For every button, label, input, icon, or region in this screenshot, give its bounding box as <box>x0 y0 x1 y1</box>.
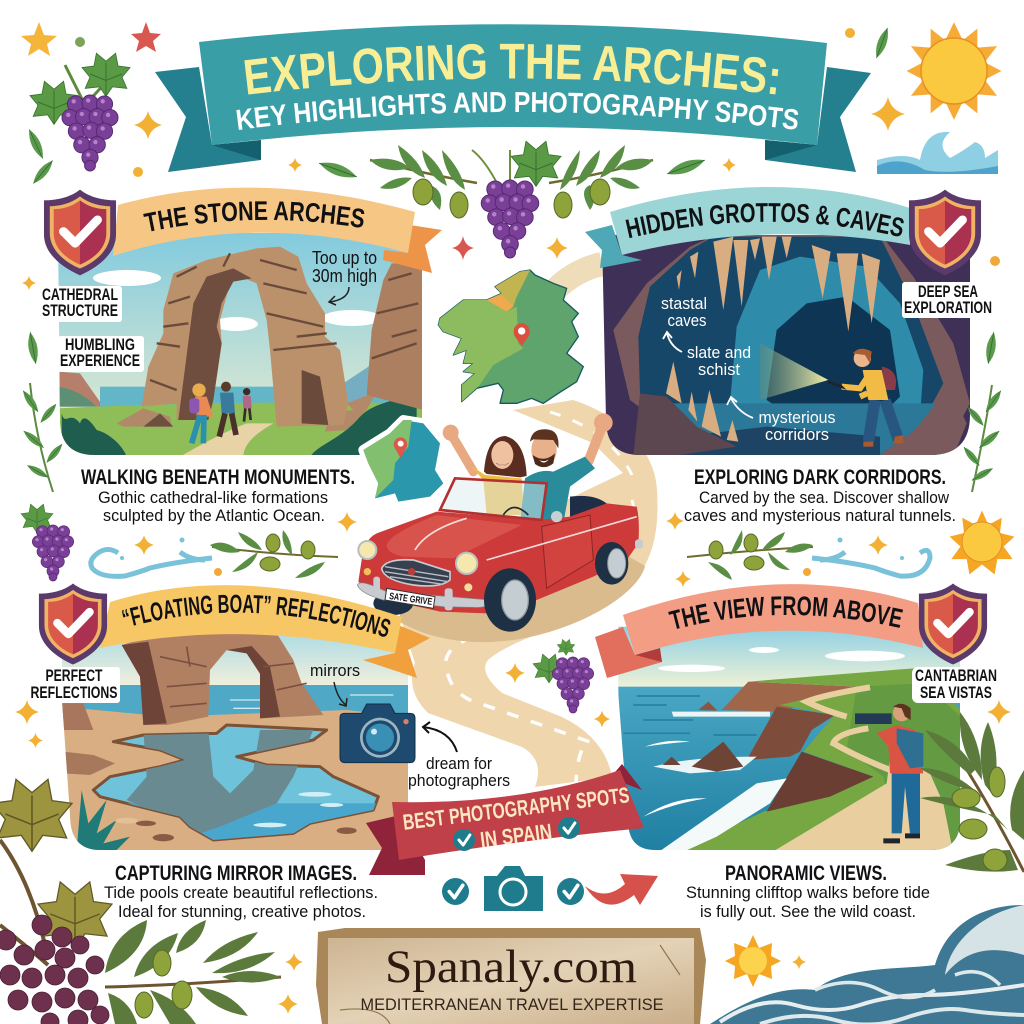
caption <box>684 466 956 525</box>
subtitle text: KEY HIGHLIGHTS AND PHOTOGRAPHY SPOTS <box>236 92 798 130</box>
small sun right <box>950 510 1014 574</box>
callout: too up to 30m high: Too up to <box>312 248 377 268</box>
caption: Tide pools create beautiful reflections. <box>104 883 378 902</box>
cave labels <box>661 294 836 444</box>
bottom right sun <box>725 935 806 987</box>
panel: floating boat reflections <box>30 584 510 921</box>
explorer with torch <box>868 400 898 442</box>
left divider: swirl and olive sprig <box>91 530 338 578</box>
bottom left vines, grapes and olives <box>0 779 303 1024</box>
tide pool <box>93 725 378 840</box>
heading ribbon: view from above <box>595 584 923 678</box>
caption: Stunning clifftop walks before tide <box>686 883 930 902</box>
caption <box>81 466 355 525</box>
arrow <box>585 874 658 905</box>
caption: PANORAMIC VIEWS. <box>725 862 887 885</box>
callout: too up to 30m high <box>312 248 377 305</box>
caption: caves and mysterious natural tunnels. <box>684 506 956 525</box>
number plate: SATE GRIVE <box>388 591 433 608</box>
banner: best photography spots in spain: IN SPAIN <box>479 819 553 852</box>
cave scene <box>600 230 977 460</box>
shield badge <box>39 583 107 665</box>
panel: the stone arches <box>42 188 442 525</box>
caption <box>686 862 930 921</box>
label: cathedral structure <box>40 286 122 322</box>
heading ribbon: the stone arches <box>113 188 442 273</box>
brand name: Spanaly.com <box>385 941 637 993</box>
label: mirrors: mirrors <box>310 661 360 680</box>
caption: WALKING BENEATH MONUMENTS. <box>81 466 355 489</box>
caption: EXPLORING DARK CORRIDORS. <box>694 466 946 489</box>
cave labels: caves <box>668 311 706 330</box>
grapes by the road <box>505 639 610 727</box>
label: cathedral structure: STRUCTURE <box>42 302 118 320</box>
callout: too up to 30m high: 30m high <box>312 266 377 286</box>
cave labels: schist <box>698 360 740 379</box>
left side foliage <box>15 276 357 748</box>
caption: Carved by the sea. Discover shallow <box>699 488 950 507</box>
cave labels: mysterious <box>758 408 836 427</box>
winding road <box>400 264 657 787</box>
cave labels: corridors <box>765 425 829 444</box>
label: mirrors <box>310 661 360 706</box>
scene art <box>58 225 424 460</box>
caption: CAPTURING MIRROR IMAGES. <box>115 862 357 885</box>
car body <box>373 592 413 615</box>
heading ribbon: floating boat <box>100 585 430 678</box>
label: dream for photographers: dream for <box>426 754 492 773</box>
caption: sculpted by the Atlantic Ocean. <box>103 506 325 525</box>
surf and rocks <box>657 778 787 853</box>
decorative top left: stars and grapes <box>21 22 162 186</box>
right divider: olive sprig and swirl <box>594 512 930 727</box>
label: cantabrian sea vistas <box>912 667 1000 703</box>
caption: is fully out. See the wild coast. <box>700 902 916 921</box>
title banner <box>155 24 871 172</box>
title text: EXPLORING THE ARCHES: <box>244 44 778 94</box>
label: perfect reflections: REFLECTIONS <box>30 684 118 702</box>
heading ribbon: view from above: THE VIEW FROM ABOVE <box>668 596 903 629</box>
label: humbling experience: HUMBLING <box>65 336 135 354</box>
caption: Ideal for stunning, creative photos. <box>118 902 366 921</box>
number plate <box>385 588 435 608</box>
couple <box>443 413 613 523</box>
caption <box>104 862 378 921</box>
camera icon with checks and arrow <box>442 866 658 911</box>
shield badge <box>44 190 116 275</box>
label: dream for photographers: photographers <box>408 771 510 790</box>
label: humbling experience: EXPERIENCE <box>60 352 140 370</box>
tagline: MEDITERRANEAN TRAVEL EXPERTISE <box>360 995 664 1014</box>
label: deep sea exploration: EXPLORATION <box>904 299 992 317</box>
red convertible car with couple <box>357 413 643 632</box>
map of northern Spain, large <box>438 270 583 403</box>
label: deep sea exploration: DEEP SEA <box>918 283 978 301</box>
label: perfect reflections <box>28 667 120 703</box>
decorative top right: sun and wave <box>845 22 1001 174</box>
photographer <box>855 713 892 724</box>
panel: the view from above <box>595 584 997 921</box>
right side foliage <box>950 256 1014 724</box>
camera icon <box>340 704 415 763</box>
grille <box>382 560 450 586</box>
banner: best photography spots in spain: BEST PHOTOGRAPHY SPOTS <box>401 782 631 835</box>
coast <box>722 682 857 712</box>
windshield <box>440 478 547 520</box>
wheels <box>484 568 536 632</box>
heading ribbon: hidden grottos: HIDDEN GROTTOS & CAVES <box>626 203 904 238</box>
banner: best photography spots in spain <box>366 764 644 875</box>
heading ribbon: floating boat: “FLOATING BOAT” REFLECTIONS <box>122 594 390 637</box>
walkers <box>192 383 206 397</box>
shield badge <box>919 583 987 665</box>
cave labels: slate and <box>687 343 751 362</box>
heading ribbon: the stone arches: THE STONE ARCHES <box>143 201 364 232</box>
bumper <box>357 583 490 607</box>
label: deep sea exploration <box>902 282 994 318</box>
bottom right olive branch <box>920 712 1024 872</box>
bottom right wave <box>710 905 1024 1024</box>
label: cantabrian sea vistas: SEA VISTAS <box>920 684 992 702</box>
caption: Gothic cathedral-like formations <box>98 488 328 507</box>
heading ribbon: hidden grottos <box>585 187 910 268</box>
label: humbling experience <box>58 336 144 372</box>
panel: hidden grottos and caves <box>585 187 992 525</box>
plaque: Spanaly.com <box>316 928 706 1024</box>
label: dream for photographers <box>408 722 510 790</box>
shield badge <box>909 190 981 275</box>
label: cantabrian sea vistas: CANTABRIAN <box>915 667 997 685</box>
cave labels: stastal <box>661 294 707 313</box>
map of northern Spain, small <box>363 420 443 502</box>
label: perfect reflections: PERFECT <box>46 667 102 685</box>
label: cathedral structure: CATHEDRAL <box>42 286 118 304</box>
central olive and grape decoration <box>288 141 736 260</box>
